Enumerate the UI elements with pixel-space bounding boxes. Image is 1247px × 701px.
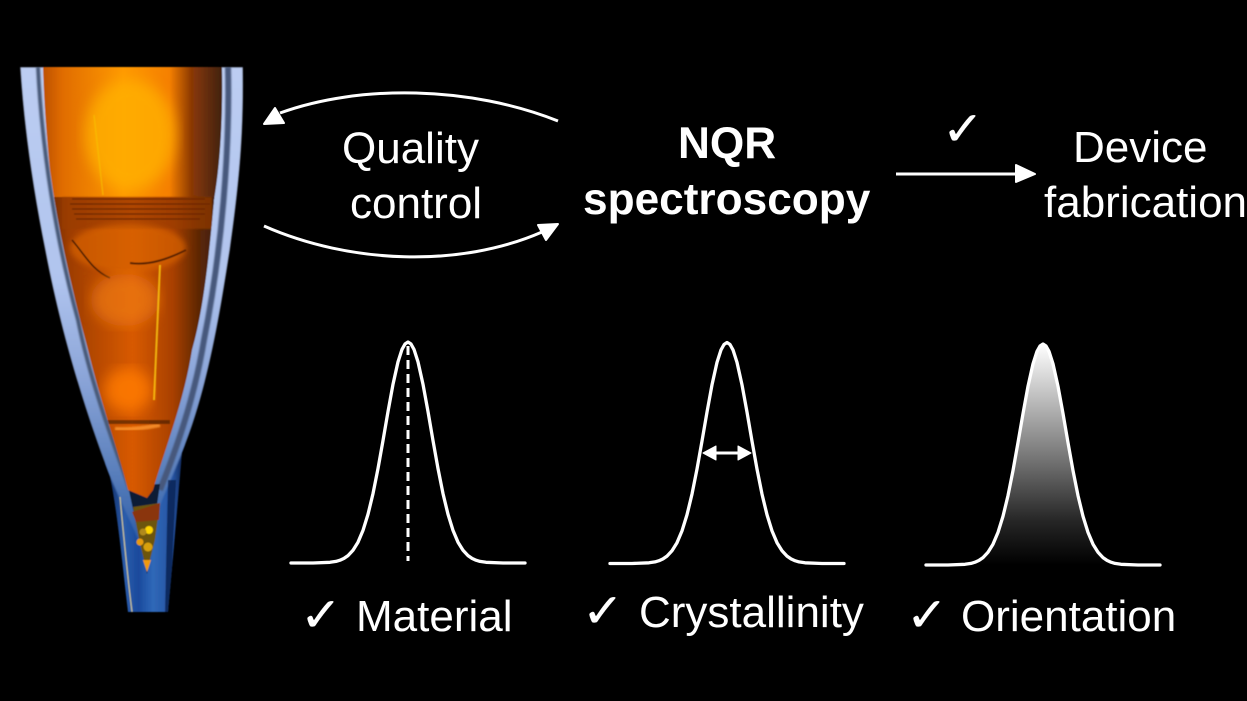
label: Quality control: Quality: [342, 124, 479, 173]
gold crystal grains: [133, 503, 160, 572]
heading: NQR spectroscopy: [583, 119, 871, 224]
arrow: to device fabrication: [896, 165, 1035, 182]
label: Quality control: [342, 124, 482, 228]
label: Orientation: ✓: [906, 588, 948, 643]
peak: material: [291, 342, 525, 563]
label: Device fabrication: Device: [1073, 123, 1208, 172]
dashed centre line: [406, 346, 410, 561]
arrow: quality control forward (bottom): [264, 224, 558, 257]
label: Material: ✓: [300, 588, 342, 643]
label: Material: Material: [356, 592, 512, 641]
photo: glass tube with orange crystal: [20, 67, 243, 615]
heading: NQR spectroscopy: spectroscopy: [583, 175, 871, 224]
label: Orientation: Orientation: [961, 592, 1176, 641]
label: Crystallinity: ✓: [582, 584, 624, 639]
label: Quality control: control: [350, 179, 482, 228]
width arrow: [703, 446, 751, 460]
check mark above arrow: ✓: [942, 102, 984, 157]
peak: orientation: [926, 344, 1160, 565]
arrow: quality control return (top): [264, 93, 558, 124]
label: Material: [300, 588, 512, 643]
peak: crystallinity: [610, 342, 844, 564]
label: Crystallinity: Crystallinity: [639, 588, 864, 637]
label: Device fabrication: [1044, 123, 1247, 227]
heading: NQR spectroscopy: NQR: [678, 119, 776, 168]
label: Device fabrication: fabrication: [1044, 178, 1247, 227]
